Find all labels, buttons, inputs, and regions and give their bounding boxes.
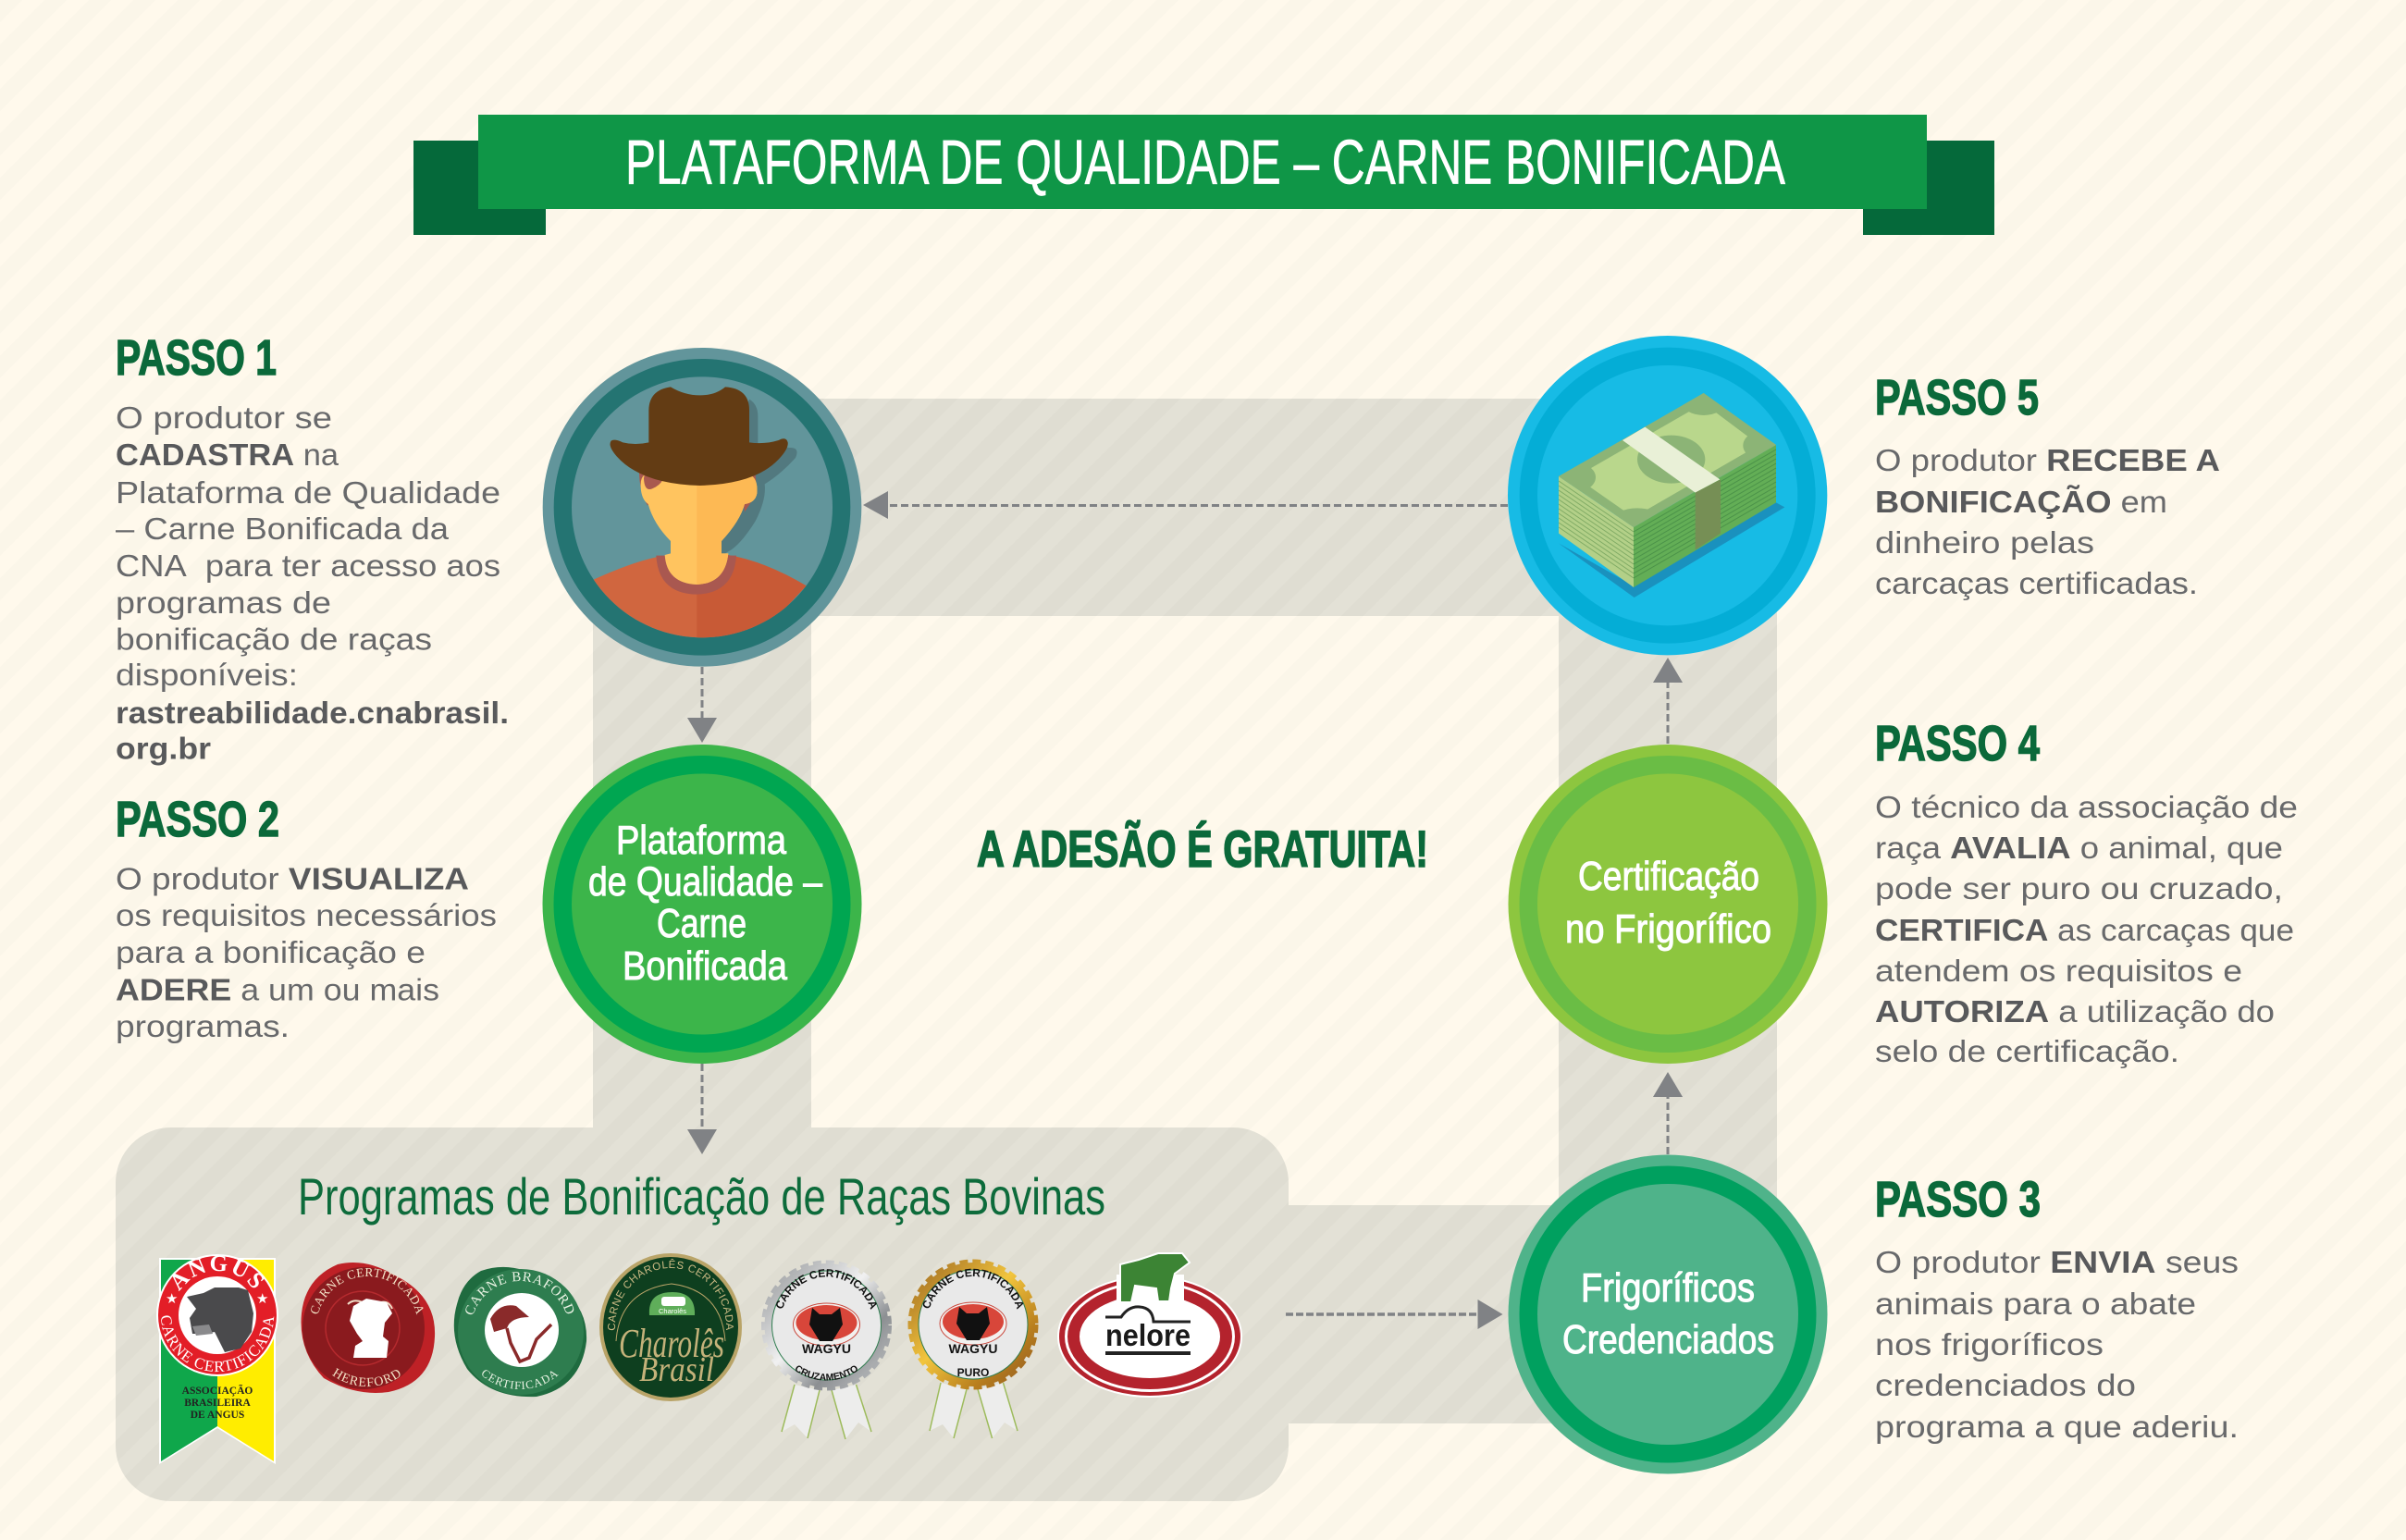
step 1 text: disponíveis: [116, 658, 298, 692]
icon: stack of money [1508, 336, 1827, 655]
step circle: platform: de Qualidade – [588, 859, 822, 905]
title: PLATAFORMA DE QUALIDADE – CARNE BONIFICADA [625, 128, 1785, 198]
step 3 text [1875, 1172, 2239, 1444]
logo: Angus: ★ [256, 1292, 268, 1307]
logo: Nelore: nelore [1105, 1318, 1191, 1352]
icon: producer with hat [543, 348, 861, 667]
panel heading: Programas de Bonificação de Raças Bovinas [298, 1167, 1105, 1226]
step 4 text: pode ser puro ou cruzado, [1875, 871, 2283, 906]
step 5 text: dinheiro pelas [1875, 525, 2094, 560]
step 3 text: O produtor ENVIA seus [1875, 1245, 2239, 1279]
step 3 text: animais para o abate [1875, 1287, 2196, 1321]
step 2 text: os requisitos necessários [116, 898, 497, 932]
step 2 text: programas. [116, 1009, 290, 1043]
logo: Wagyu cruzamento: CRUZAMENTO [796, 1365, 858, 1381]
step 3 text: credenciados do [1875, 1368, 2136, 1402]
step circle: platform [542, 745, 862, 1064]
step circle: slaughterhouses: Credenciados [1562, 1317, 1774, 1362]
logo: Hereford [302, 1263, 435, 1393]
logo: Wagyu puro: CARNE CERTIFICADA [923, 1269, 1023, 1310]
logo: Nelore [1057, 1253, 1242, 1398]
arrow: slaughterhouses to certification [1653, 1072, 1683, 1154]
step circle: certification [1508, 745, 1828, 1064]
step 4 text: atendem os requisitos e [1875, 954, 2242, 988]
step 1 text: rastreabilidade.cnabrasil. [116, 696, 509, 730]
step 4 text: selo de certificação. [1875, 1034, 2179, 1068]
step circle: certification: no Frigorífico [1565, 906, 1771, 952]
arrow: programs to slaughterhouses [1286, 1300, 1502, 1329]
logo: Wagyu cruzamento: WAGYU [802, 1341, 851, 1356]
logo: Angus [156, 1254, 278, 1464]
step 1 text: PASSO 1 [116, 330, 277, 386]
logo: Wagyu cruzamento: CARNE CERTIFICADA [776, 1269, 877, 1310]
logo: Angus: CARNE CERTIFICADA [161, 1315, 274, 1373]
step 4 text: CERTIFICA as carcaças que [1875, 913, 2294, 947]
logo: Hereford: HEREFORD [332, 1367, 400, 1387]
panel: programas de bonificação [116, 1127, 1289, 1501]
step 3 text: programa a que aderiu. [1875, 1410, 2239, 1444]
step 5 text: BONIFICAÇÃO em [1875, 485, 2167, 519]
step circle: certification: Certificação [1578, 854, 1759, 899]
step circle: platform: Plataforma [616, 818, 786, 863]
step circle: platform: Carne [657, 901, 746, 946]
logo: Charolês: Brasil [639, 1350, 714, 1389]
logo: Angus: ASSOCIAÇÃO [182, 1384, 253, 1397]
step 3 text: nos frigoríficos [1875, 1327, 2104, 1361]
step 2 text: PASSO 2 [116, 792, 279, 847]
step 4 text: PASSO 4 [1875, 716, 2040, 771]
logo: Angus: BRASILEIRA [184, 1398, 251, 1409]
logo: Braford: CERTIFICADA [482, 1370, 559, 1389]
step 4 text: raça AVALIA o animal, que [1875, 831, 2283, 865]
step circle: slaughterhouses: Frigoríficos [1581, 1265, 1755, 1311]
logo: Angus: ★ [166, 1292, 178, 1307]
flow bands connecting the steps [593, 399, 1777, 1423]
arrow: money to producer [863, 491, 1508, 519]
callout: free membership: A ADESÃO É GRATUITA! [977, 819, 1428, 878]
logo: Wagyu puro: WAGYU [949, 1341, 997, 1356]
step 5 text: carcaças certificadas. [1875, 566, 2198, 600]
step 4 text [1875, 716, 2298, 1068]
title banner [413, 115, 1994, 235]
logo: Charolês: Charolês [659, 1307, 686, 1315]
step 5 text: O produtor RECEBE A [1875, 443, 2220, 477]
arrow: producer to platform [687, 667, 717, 743]
logo: Braford: CARNE BRAFORD [465, 1272, 574, 1315]
step 1 text [116, 330, 509, 766]
arrow: certification to money [1653, 658, 1683, 744]
step 1 text: org.br [116, 731, 211, 766]
logo: Wagyu cruzamento [761, 1260, 892, 1439]
step 5 text [1875, 370, 2220, 600]
step 2 text: ADERE a um ou mais [116, 973, 439, 1006]
arrow: platform to programs [687, 1064, 717, 1154]
step 2 text: para a bonificação e [116, 935, 426, 969]
logo: Hereford: CARNE CERTIFICADA [311, 1268, 424, 1315]
logo: Angus: ANGUS [172, 1256, 265, 1291]
step 1 text: Plataforma de Qualidade [116, 475, 500, 510]
step 3 text: PASSO 3 [1875, 1172, 2041, 1227]
step circle: platform: Bonificada [623, 943, 787, 989]
step 4 text: AUTORIZA a utilização do [1875, 994, 2275, 1029]
step 1 text: CADASTRA na [116, 437, 339, 472]
step 5 text: PASSO 5 [1875, 370, 2039, 425]
step 1 text: O produtor se [116, 400, 332, 435]
logo: Wagyu puro [908, 1260, 1038, 1439]
step 1 text: CNA para ter acesso aos [116, 548, 500, 583]
step circle: slaughterhouses [1508, 1154, 1828, 1474]
logo: Angus: DE ANGUS [191, 1410, 244, 1421]
step 2 text: O produtor VISUALIZA [116, 862, 469, 895]
logo: Charolês: CARNE CHAROLÊS CERTIFICADA [608, 1258, 734, 1330]
step 1 text: – Carne Bonificada da [116, 511, 450, 546]
logo: Charolês [599, 1253, 742, 1401]
logo: Charolês: Charolês [619, 1321, 724, 1366]
step 4 text: O técnico da associação de [1875, 790, 2298, 824]
step 2 text [116, 792, 497, 1043]
step 1 text: bonificação de raças [116, 622, 432, 657]
logo: Wagyu puro: PURO [957, 1366, 989, 1379]
step 1 text: programas de [116, 585, 331, 620]
logo: Braford [453, 1267, 586, 1397]
